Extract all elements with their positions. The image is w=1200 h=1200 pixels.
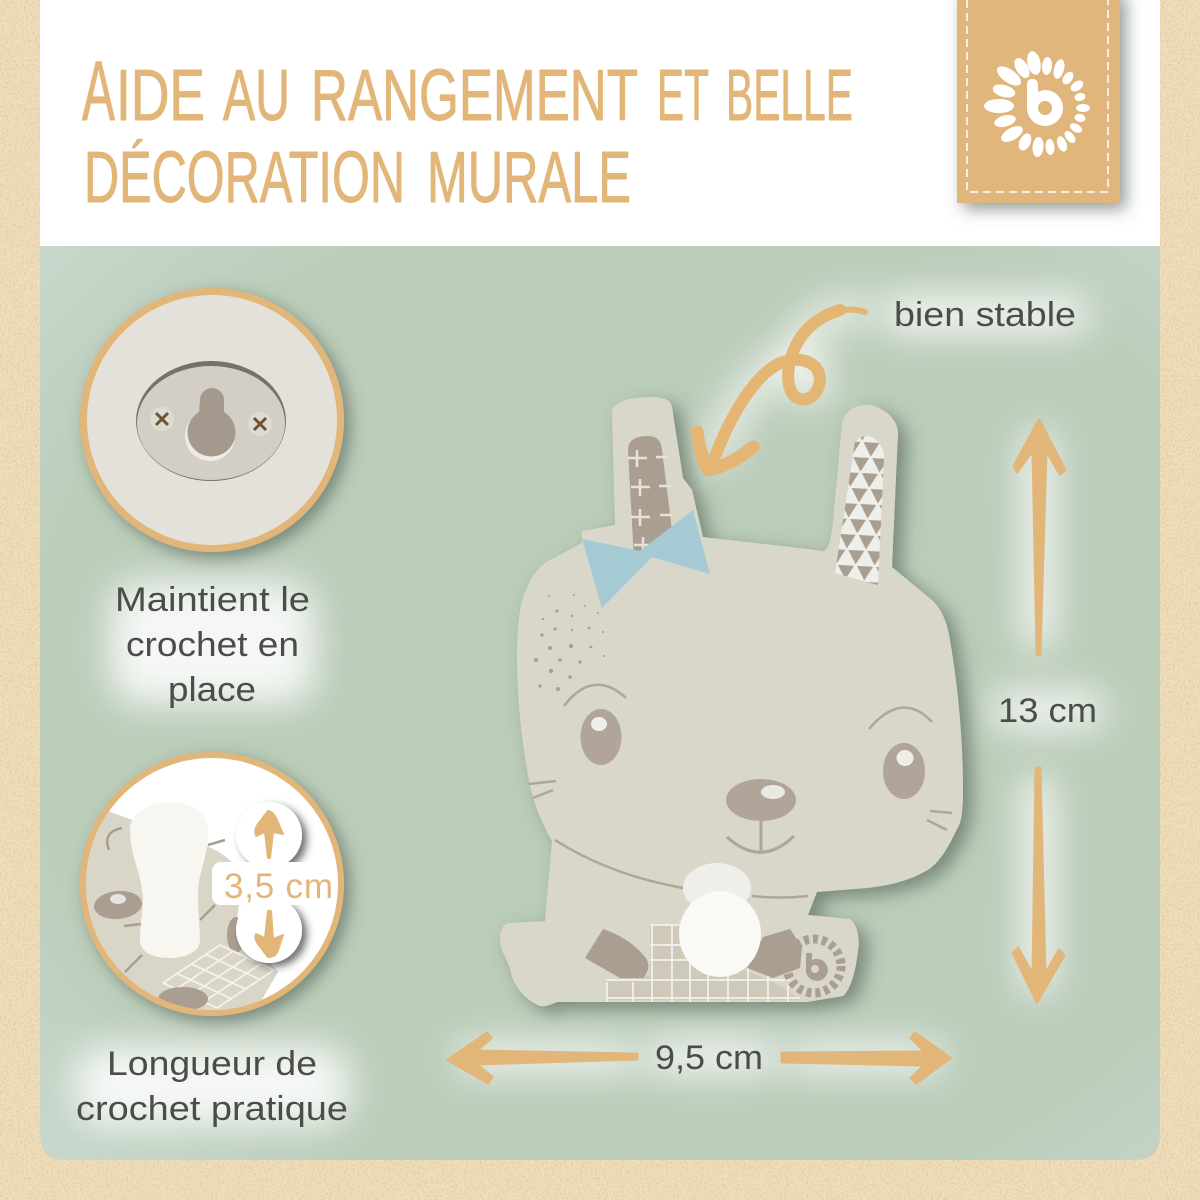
label: 13 cm: 13 cm bbox=[998, 692, 1097, 730]
title: A bbox=[82, 44, 115, 138]
arrow: width left bbox=[448, 1033, 637, 1083]
caption: fixing plate: crochet en bbox=[126, 626, 299, 664]
icon: brand logo bbox=[984, 50, 1090, 157]
icon: metal keyhole plate bbox=[136, 361, 286, 481]
title: DÉCORATION bbox=[84, 138, 405, 218]
caption: fixing plate: Maintient le bbox=[115, 581, 310, 619]
white peg bbox=[679, 863, 761, 977]
blue bow bbox=[582, 510, 710, 608]
checked grid bbox=[606, 925, 800, 1002]
caption: fixing plate: place bbox=[168, 671, 256, 709]
left ear patch bbox=[628, 436, 672, 560]
right ear patch bbox=[835, 436, 884, 585]
paws bbox=[585, 929, 802, 978]
bunny wall hook bbox=[500, 397, 963, 1006]
small brand logo bbox=[787, 939, 841, 993]
circle: wall fixing plate bbox=[80, 288, 344, 552]
header band bbox=[40, 0, 1160, 246]
hook peg bbox=[130, 802, 208, 958]
caption: hook length: Longueur de bbox=[107, 1045, 317, 1083]
arrow up button bbox=[236, 802, 302, 868]
freckles bbox=[534, 594, 605, 691]
title: MURALE bbox=[427, 138, 631, 218]
title bbox=[82, 44, 853, 218]
caption: hook length bbox=[76, 1045, 348, 1128]
title: BELLE bbox=[726, 56, 853, 136]
brows, whiskers and neck line bbox=[529, 685, 952, 898]
arrow: width right bbox=[782, 1033, 950, 1083]
arrow down button bbox=[236, 897, 302, 963]
eyes bbox=[580, 709, 925, 799]
arrow: curl to ear bbox=[697, 310, 865, 470]
caption: hook length: crochet pratique bbox=[76, 1090, 348, 1128]
label: 9,5 cm: 9,5 cm bbox=[655, 1039, 763, 1077]
title: RANGEMENT bbox=[311, 56, 638, 136]
title: IDE bbox=[116, 56, 205, 136]
nose and mouth bbox=[726, 779, 796, 853]
label 3,5 cm: 3,5 cm bbox=[224, 867, 333, 906]
circle: hook length bbox=[70, 752, 344, 1020]
title: AU bbox=[223, 56, 290, 136]
white glows behind labels and arrows bbox=[75, 295, 1105, 1126]
arrow: height up bbox=[1014, 420, 1065, 655]
caption: fixing plate bbox=[115, 581, 310, 709]
bunny body bbox=[500, 397, 963, 1006]
title: ET bbox=[657, 56, 709, 136]
label: bien stable: bien stable bbox=[894, 296, 1076, 334]
green panel bbox=[40, 246, 1160, 1160]
brand label tag bbox=[957, 0, 1120, 203]
arrow: height down bbox=[1013, 768, 1064, 1002]
